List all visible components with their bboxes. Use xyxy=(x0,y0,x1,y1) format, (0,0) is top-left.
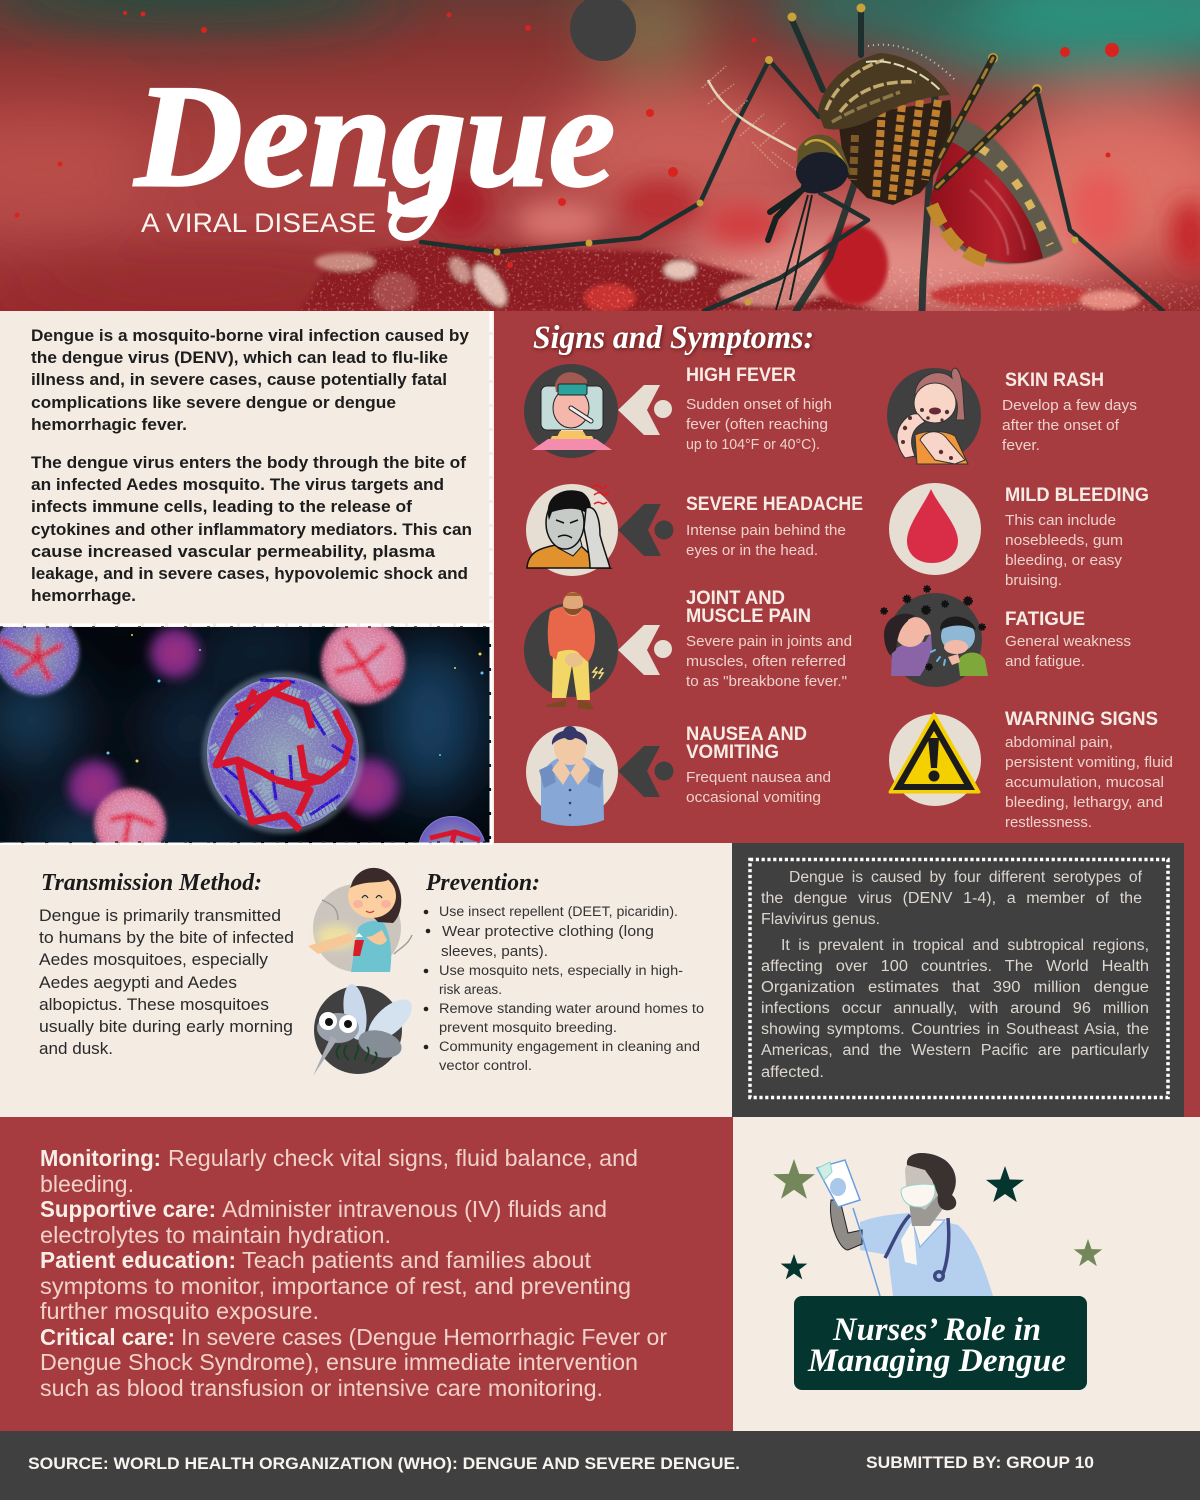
symptom: joint and muscle pain xyxy=(686,588,852,690)
dashed seams around the virus image xyxy=(0,311,491,845)
arrow: nausea and vomiting xyxy=(618,746,674,797)
panel: introduction xyxy=(0,311,491,625)
icon: high fever xyxy=(524,364,618,458)
symptom: high fever: fever (often reaching xyxy=(686,416,828,433)
stars xyxy=(773,1159,1102,1279)
symptom: high fever: up to 104°F or 40°C). xyxy=(686,436,820,453)
intro paragraph 1 xyxy=(31,326,470,434)
critical care: such as blood transfusion or intensive care monitoring. xyxy=(40,1375,603,1401)
symptom: mild bleeding: nosebleeds, gum xyxy=(1005,532,1123,549)
icon: nausea and vomiting xyxy=(526,726,618,826)
lower thorax stripes xyxy=(838,100,951,205)
submitted by: SUBMITTED BY: GROUP 10 xyxy=(866,1453,1094,1472)
patient education: Teach patients and families about xyxy=(242,1247,592,1273)
monitoring: Monitoring: xyxy=(40,1145,161,1171)
icon: severe headache xyxy=(526,484,618,576)
arrow: high fever xyxy=(618,385,672,435)
heading: signs and symptoms: Signs and Symptoms: xyxy=(533,320,814,356)
panel: signs and symptoms xyxy=(494,311,1200,1117)
prevalence text: infections occur annually, with around 96 million xyxy=(761,1000,1149,1017)
subtitle: A VIRAL DISEASE xyxy=(141,208,376,238)
banner: nurses' role xyxy=(794,1296,1087,1390)
supportive care: Supportive care: xyxy=(40,1196,216,1222)
symptom: warning signs: abdominal pain, xyxy=(1005,734,1113,751)
symptom: warning signs: bleeding, lethargy, and xyxy=(1005,794,1163,811)
symptom: warning signs: accumulation, mucosal xyxy=(1005,774,1164,791)
symptom: nausea and vomiting: VOMITING xyxy=(686,742,779,763)
prevalence text: affected. xyxy=(761,1064,824,1081)
critical care: In severe cases (Dengue Hemorrhagic Fever or xyxy=(181,1324,667,1350)
panel: transmission and prevention xyxy=(0,845,732,1117)
icon: cartoon mosquito xyxy=(313,983,419,1076)
blurred pink virions xyxy=(63,623,404,821)
prevention list: Use mosquito nets, especially in high- xyxy=(439,963,683,978)
icon: warning sign xyxy=(889,714,981,806)
intro paragraph 2: infects immune cells, leading to the release of xyxy=(31,497,412,516)
prevention list: sleeves, pants). xyxy=(441,943,548,960)
icon: blood drop xyxy=(889,483,981,575)
intro paragraph 2 xyxy=(31,453,472,605)
intro paragraph 2: The dengue virus enters the body through the bite of xyxy=(31,453,466,472)
monitoring xyxy=(40,1145,638,1197)
symptom: joint and muscle pain: JOINT AND xyxy=(686,588,785,609)
antenna xyxy=(708,80,796,150)
symptom: high fever: HIGH FEVER xyxy=(686,365,796,386)
prevalence text: affecting over 100 countries. The World Health xyxy=(761,958,1149,975)
prevalence text: It is prevalent in tropical and subtropical regions, xyxy=(781,937,1149,954)
symptom: mild bleeding: bruising. xyxy=(1005,572,1062,589)
banner: nurses' role: Nurses’ Role in xyxy=(832,1312,1041,1348)
critical care: Dengue Shock Syndrome), ensure immediate intervention xyxy=(40,1349,638,1375)
patient education: symptoms to monitor, importance of rest, and preventing xyxy=(40,1273,631,1299)
prevalence text xyxy=(761,937,1149,1081)
patient education: Patient education: xyxy=(40,1247,236,1273)
prevention list xyxy=(424,904,704,1073)
panel: serotypes and prevalence xyxy=(732,843,1184,1117)
symptom: mild bleeding xyxy=(1005,485,1149,589)
transmission text xyxy=(39,907,294,1058)
arrow: severe headache xyxy=(618,504,674,556)
symptom: joint and muscle pain: to as "breakbone fever." xyxy=(686,673,847,690)
intro paragraph 1: complications like severe dengue or dengue xyxy=(31,393,396,412)
symptom: fatigue: General weakness xyxy=(1005,633,1131,650)
heading: prevention: Prevention: xyxy=(425,870,540,896)
intro paragraph 1: Dengue is a mosquito-borne viral infection caused by xyxy=(31,326,470,345)
intro paragraph 2: cytokines and other inflammatory mediators. This can xyxy=(31,520,472,539)
prevention list: Use insect repellent (DEET, picaridin). xyxy=(439,904,678,919)
mosquito photo xyxy=(421,4,1163,311)
symptom: joint and muscle pain: MUSCLE PAIN xyxy=(686,606,811,627)
serotypes text xyxy=(761,869,1143,928)
symptom: nausea and vomiting xyxy=(686,724,831,806)
symptom: warning signs xyxy=(1005,709,1173,831)
red blood drop xyxy=(822,225,888,305)
symptom: skin rash: after the onset of xyxy=(1002,417,1120,434)
prevention list: risk areas. xyxy=(439,982,502,997)
prevention list: Wear protective clothing (long xyxy=(442,923,654,940)
intro paragraph 2: an infected Aedes mosquito. The virus targets and xyxy=(31,475,444,494)
symptom: fatigue xyxy=(1005,609,1131,670)
intro paragraph 1: the dengue virus (DENV), which can lead to flu-like xyxy=(31,348,448,367)
symptom: warning signs: persistent vomiting, fluid xyxy=(1005,754,1173,771)
intro paragraph 1: hemorrhagic fever. xyxy=(31,415,187,434)
transmission text: Aedes aegypti and Aedes xyxy=(39,974,237,992)
main virion xyxy=(202,672,364,834)
background virions xyxy=(0,627,408,843)
symptom: severe headache: SEVERE HEADACHE xyxy=(686,494,863,515)
symptom: skin rash: fever. xyxy=(1002,437,1040,454)
symptom: skin rash: SKIN RASH xyxy=(1005,370,1104,391)
bottom-right virion xyxy=(418,816,485,843)
abdomen xyxy=(930,118,1063,264)
icon: fatigue xyxy=(881,586,988,687)
serotypes text: Flavivirus genus. xyxy=(761,911,880,928)
patient education: further mosquito exposure. xyxy=(40,1298,319,1324)
panel: nurses' role xyxy=(0,1117,733,1431)
symptom: nausea and vomiting: NAUSEA AND xyxy=(686,724,807,745)
symptom: joint and muscle pain: Severe pain in joints and xyxy=(686,633,852,650)
symptom: warning signs: restlessness. xyxy=(1005,814,1092,831)
intro paragraph 2: cause increased vascular permeability, plasma xyxy=(31,542,436,561)
icon: joint and muscle pain xyxy=(524,592,618,710)
symptom: high fever xyxy=(686,365,832,453)
heading: transmission method: Transmission Method: xyxy=(41,870,262,896)
symptom: skin rash: Develop a few days xyxy=(1002,397,1137,414)
critical care: Critical care: xyxy=(40,1324,175,1350)
image: dengue virus particles xyxy=(0,627,491,843)
supportive care: electrolytes to maintain hydration. xyxy=(40,1222,391,1248)
icon: skin rash xyxy=(887,368,981,464)
intro paragraph 2: hemorrhage. xyxy=(31,586,136,605)
arrow: joint and muscle pain xyxy=(618,625,672,675)
transmission text: Dengue is primarily transmitted xyxy=(39,907,281,925)
symptom: severe headache: eyes or in the head. xyxy=(686,542,818,559)
supportive care: Administer intravenous (IV) fluids and xyxy=(222,1196,607,1222)
prevention list: Remove standing water around homes to xyxy=(439,1001,704,1016)
symptom: mild bleeding: bleeding, or easy xyxy=(1005,552,1123,569)
symptom: severe headache xyxy=(686,494,863,559)
symptom: skin rash xyxy=(1002,370,1137,454)
title: Dengue: Dengue xyxy=(133,55,615,217)
supportive care xyxy=(40,1196,607,1248)
monitoring: bleeding. xyxy=(40,1171,134,1197)
symptom: mild bleeding: MILD BLEEDING xyxy=(1005,485,1149,506)
symptom: joint and muscle pain: muscles, often referred xyxy=(686,653,846,670)
prevention list: Community engagement in cleaning and xyxy=(439,1039,700,1054)
transmission text: and dusk. xyxy=(39,1040,113,1058)
symptom: severe headache: Intense pain behind the xyxy=(686,522,846,539)
symptom: warning signs: WARNING SIGNS xyxy=(1005,709,1158,730)
prevalence text: Organization estimates that 390 million dengue xyxy=(761,979,1149,996)
transmission text: Aedes mosquitoes, especially xyxy=(39,951,269,969)
source: SOURCE: WORLD HEALTH ORGANIZATION (WHO): DENGUE AND SEVERE DENGUE. xyxy=(28,1454,740,1473)
symptom: nausea and vomiting: occasional vomiting xyxy=(686,789,821,806)
intro paragraph 1: illness and, in severe cases, cause potentially fatal xyxy=(31,370,447,389)
prevention list: vector control. xyxy=(439,1058,532,1073)
thorax xyxy=(818,53,950,129)
hero photo backdrop xyxy=(0,0,1200,315)
transmission text: usually bite during early morning xyxy=(39,1018,293,1036)
critical care xyxy=(40,1324,667,1401)
serotypes text: Dengue is caused by four different serotypes of xyxy=(789,869,1143,886)
transmission text: to humans by the bite of infected xyxy=(39,929,294,947)
symptom: nausea and vomiting: Frequent nausea and xyxy=(686,769,831,786)
panel: nurse illustration xyxy=(735,1117,1200,1431)
symptom: fatigue: FATIGUE xyxy=(1005,609,1085,630)
title: Dengue xyxy=(132,88,614,241)
prevalence text: showing symptoms. Countries in Southeast Asia, the xyxy=(761,1021,1149,1038)
prevention list: prevent mosquito breeding. xyxy=(439,1020,617,1035)
serotypes text: the dengue virus (DENV 1-4), a member of the xyxy=(761,890,1142,907)
footer xyxy=(0,1431,1200,1500)
symptom: high fever: Sudden onset of high xyxy=(686,396,832,413)
dark circle ornament xyxy=(570,0,636,61)
head xyxy=(797,134,851,173)
textured ground xyxy=(300,245,1140,312)
transmission text: albopictus. These mosquitoes xyxy=(39,996,269,1014)
banner: nurses' role: Managing Dengue xyxy=(807,1343,1066,1379)
symptom: fatigue: and fatigue. xyxy=(1005,653,1085,670)
symptom: mild bleeding: This can include xyxy=(1005,512,1116,529)
hero banner xyxy=(0,0,1200,315)
striped front legs xyxy=(937,58,1037,187)
icon: woman applying repellent xyxy=(308,868,412,972)
prevalence text: Americas, and the Western Pacific are particularly xyxy=(761,1042,1149,1059)
intro paragraph 2: leakage, and in severe cases, hypovolemic shock and xyxy=(31,564,468,583)
patient education xyxy=(40,1247,631,1324)
nurse figure xyxy=(817,1153,993,1296)
monitoring: Regularly check vital signs, fluid balance, and xyxy=(168,1145,638,1171)
